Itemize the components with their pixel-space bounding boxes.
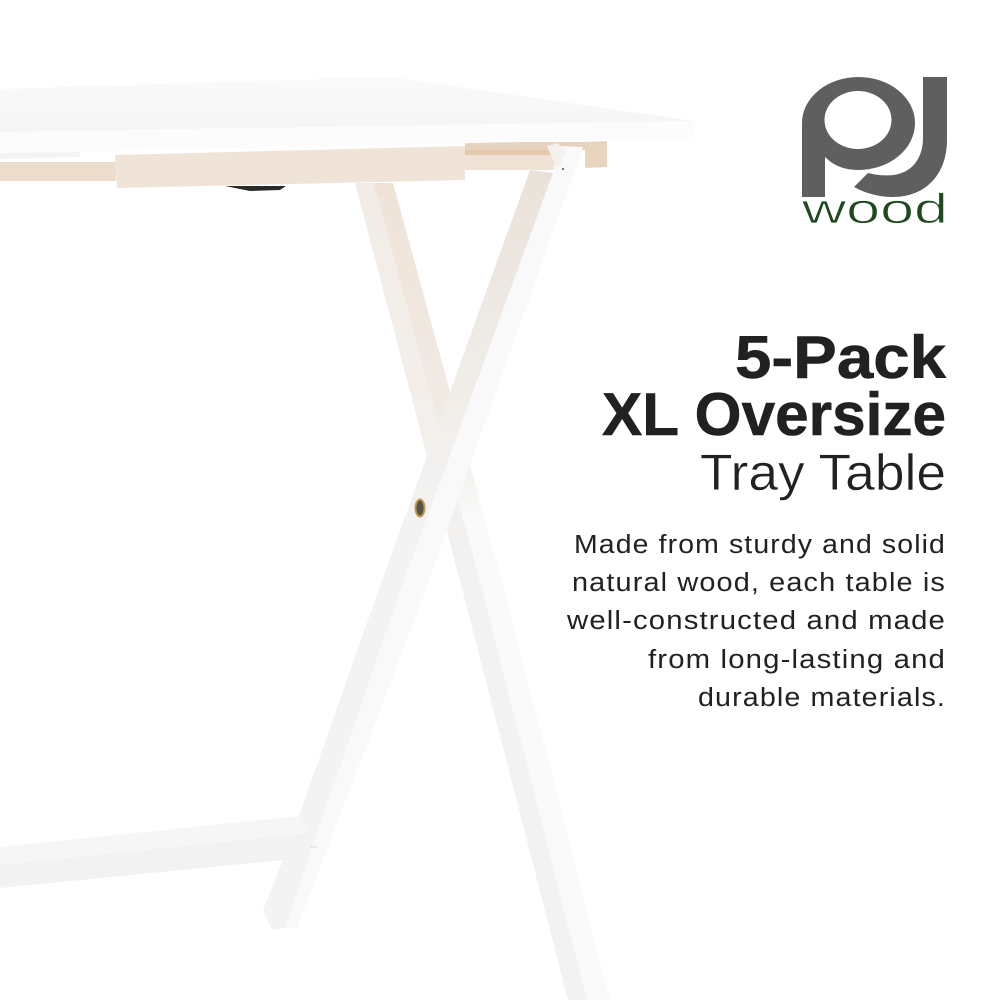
body text: Made from sturdy and solid — [574, 531, 946, 559]
rear leg — [355, 183, 610, 1000]
body text: well-constructed and made — [566, 607, 946, 635]
logo wordmark: wood: wood — [801, 185, 948, 232]
table illustration — [0, 77, 694, 1000]
logo — [801, 77, 948, 232]
heading: 5-Pack — [735, 324, 947, 391]
leg pivot bolt — [414, 498, 426, 518]
heading — [602, 324, 947, 501]
wood apron — [115, 146, 465, 188]
body text: from long-lasting and — [648, 646, 946, 674]
heading: XL Oversize — [602, 381, 946, 448]
cross bar — [0, 816, 316, 888]
underside wood dowels — [0, 141, 607, 191]
body text: natural wood, each table is — [572, 569, 946, 597]
body text — [566, 531, 946, 712]
front leg — [263, 143, 583, 930]
logo mark: pj — [802, 77, 947, 197]
body text: durable materials. — [698, 684, 946, 712]
heading: Tray Table — [700, 444, 946, 501]
table top — [0, 77, 694, 159]
